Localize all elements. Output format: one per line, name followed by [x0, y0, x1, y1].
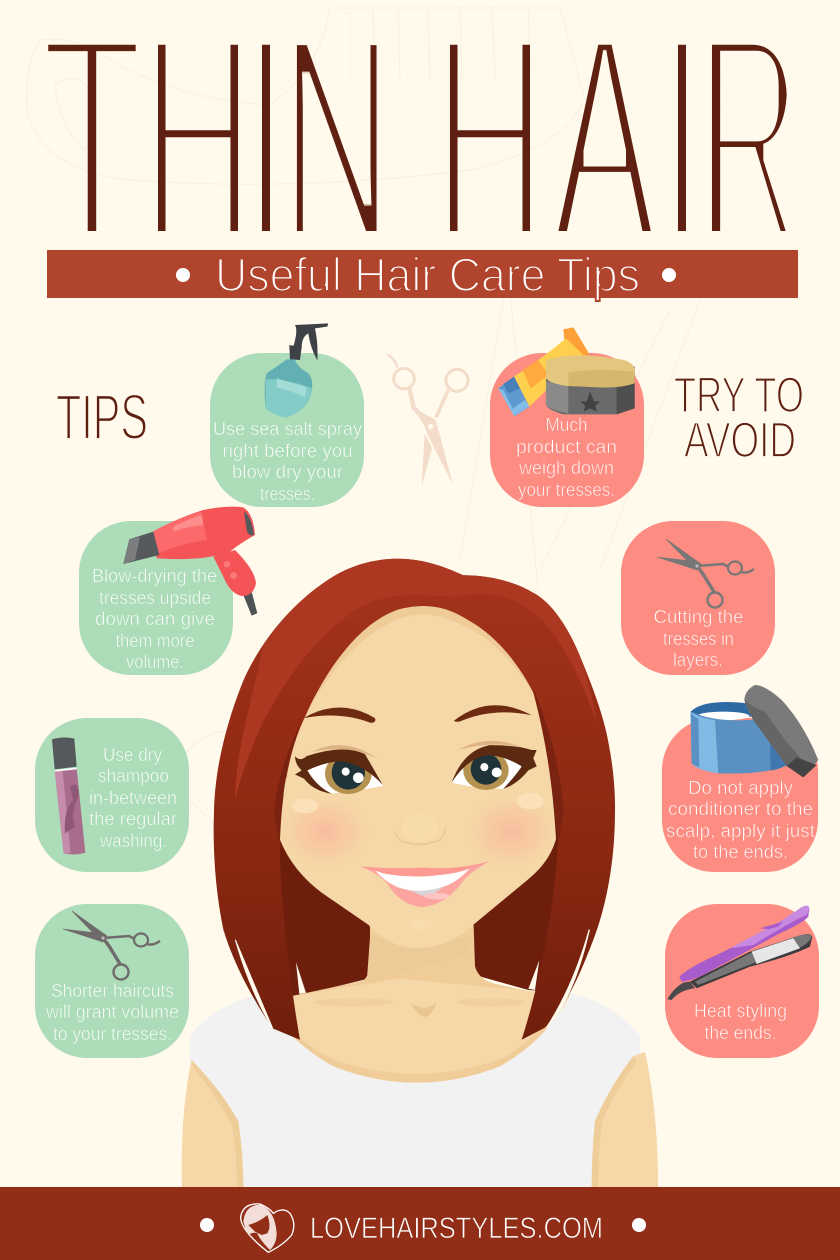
tip text: right before you — [222, 441, 352, 461]
warning text: tresses in — [663, 629, 734, 649]
logo: heart and profile — [241, 1204, 294, 1252]
icon: conditioner jar — [691, 685, 818, 777]
title — [41, 0, 800, 302]
tip text: Blow-drying the — [92, 566, 217, 586]
hair gaps — [235, 940, 273, 1028]
warning text: scalp, apply it just — [666, 821, 815, 841]
heading: tips: TIPS — [56, 381, 148, 453]
warning text: Do not apply — [688, 778, 793, 798]
tip text: tresses. — [260, 484, 315, 504]
tip text: Use dry — [103, 745, 162, 765]
back hair — [267, 795, 570, 999]
tip text: tresses upside — [99, 588, 211, 608]
heading: try to avoid: AVOID — [684, 412, 796, 468]
icon: decorative scissors — [387, 355, 468, 484]
footer bar — [0, 1187, 840, 1260]
icon: scissors — [63, 911, 160, 980]
panel: heat styling warning — [665, 904, 819, 1058]
warning text: to the ends. — [693, 842, 788, 862]
warning text: weigh down — [518, 458, 614, 478]
icon: scissors — [657, 539, 754, 608]
hair shadow by face — [274, 689, 563, 846]
panel: shorter haircuts tip — [35, 904, 189, 1058]
hair highlight band — [235, 559, 597, 799]
warning text — [516, 415, 617, 500]
icon: spray bottle — [265, 323, 328, 417]
tip text: Use sea salt spray — [213, 419, 362, 439]
tip text: will grant volume — [45, 1002, 179, 1022]
face — [280, 606, 556, 948]
chin highlight — [410, 919, 433, 930]
warning text: Heat styling — [694, 1001, 787, 1021]
tip text: Shorter haircuts — [51, 981, 174, 1001]
tip text: them more — [116, 631, 194, 651]
background watermark: comb and hair lines — [27, 4, 700, 850]
icon: product tube and wax jar — [498, 327, 635, 416]
nose — [395, 813, 445, 844]
tip text: volume. — [126, 652, 184, 672]
panel: upside down blow-drying tip — [79, 507, 257, 675]
cheek highlights — [292, 793, 543, 813]
left arm — [182, 1060, 243, 1189]
tip text: the regular — [89, 809, 177, 829]
mouth — [360, 861, 489, 907]
subtitle banner — [47, 248, 798, 301]
right eye — [452, 741, 537, 790]
tip text — [92, 566, 217, 672]
tip text: shampoo — [98, 766, 169, 786]
heading: try to avoid — [674, 367, 804, 468]
eyebrows — [303, 705, 532, 723]
panel: sea salt spray tip — [210, 323, 364, 507]
panel: layered cuts warning — [621, 521, 775, 675]
tip text: in-between — [89, 788, 177, 808]
illustration: woman with red bob haircut — [182, 559, 658, 1189]
warning text: Cutting the — [654, 607, 744, 627]
warning text: Much — [546, 415, 588, 435]
warning text: your tresses. — [518, 480, 615, 500]
warning text: product can — [516, 437, 617, 457]
panel: conditioner warning — [662, 685, 818, 872]
right blush — [467, 795, 557, 868]
neck and chest — [267, 917, 570, 1083]
panel: dry shampoo tip — [35, 718, 189, 872]
left eye — [295, 745, 383, 794]
website: LOVEHAIRSTYLES.COM — [310, 1212, 603, 1245]
tip text: down can give — [95, 609, 215, 629]
shirt — [190, 993, 640, 1187]
icon: hair dryer — [123, 507, 257, 616]
tip text — [89, 745, 177, 851]
main hair — [214, 559, 615, 1040]
warning text: the ends. — [704, 1023, 776, 1043]
warning text: conditioner to the — [668, 799, 813, 819]
warning text — [654, 607, 744, 670]
icon: flat iron — [667, 906, 812, 1000]
panel: too much product warning — [490, 327, 644, 507]
tip text: blow dry your — [232, 462, 343, 482]
right arm — [592, 1052, 658, 1189]
tip text: to your tresses. — [53, 1024, 172, 1044]
left blush — [280, 795, 370, 868]
icon: dry shampoo can — [52, 737, 85, 855]
tip text — [213, 419, 362, 504]
subtitle banner: Useful Hair Care Tips — [215, 248, 640, 301]
tip text: washing. — [99, 831, 167, 851]
warning text — [694, 1001, 787, 1043]
warning text — [666, 778, 815, 862]
warning text: layers. — [673, 650, 723, 670]
tip text — [45, 981, 179, 1044]
